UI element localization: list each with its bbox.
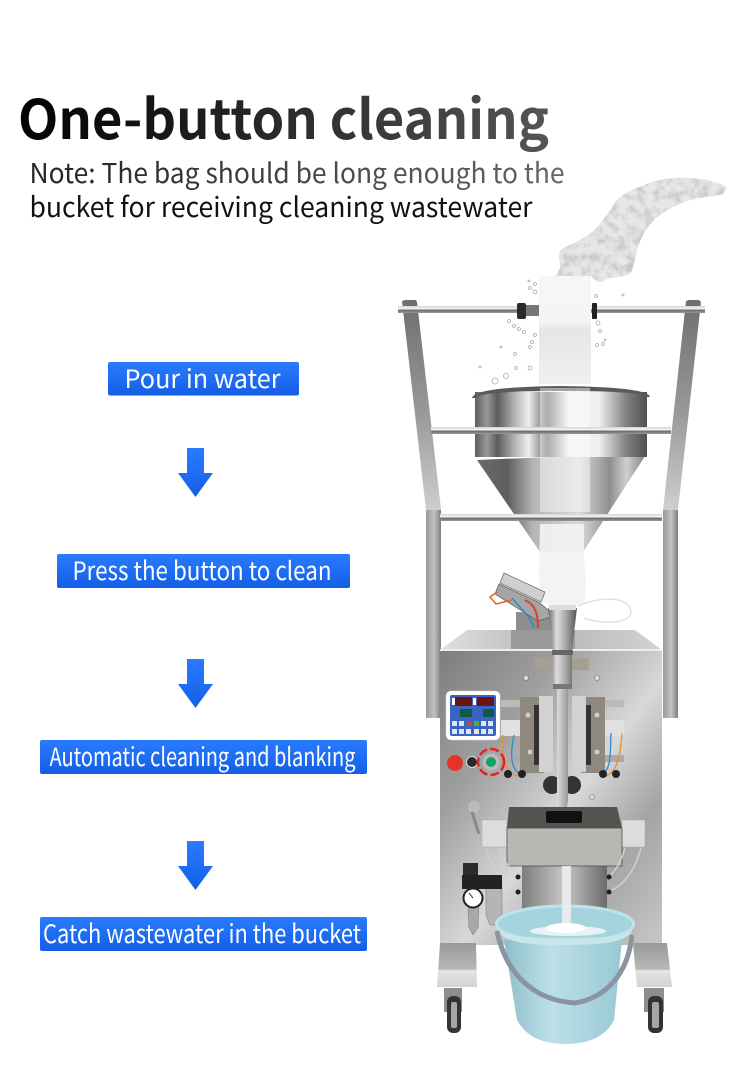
highlighted clean button	[478, 749, 504, 775]
note text: Note: The bag should be long enough to the	[30, 151, 564, 191]
tubes	[503, 733, 622, 776]
left post	[426, 510, 441, 718]
sealing blocks	[501, 696, 624, 794]
screws	[524, 676, 600, 800]
step 1: pour in water: Pour in water	[124, 359, 281, 396]
falling water	[562, 866, 571, 926]
machine body	[440, 630, 662, 945]
title: One-button cleaning	[18, 76, 549, 155]
step 3: automatic cleaning: Automatic cleaning and blanking	[50, 737, 356, 774]
handle	[497, 931, 632, 1003]
bucket	[496, 866, 634, 1044]
frame cross rods	[431, 427, 671, 521]
holes	[504, 770, 620, 778]
filling nozzle	[548, 605, 577, 822]
arrow 1	[178, 448, 213, 497]
lower sealing unit	[468, 801, 645, 910]
arrow 3	[178, 841, 213, 890]
main panel	[440, 650, 662, 945]
displays	[455, 697, 472, 706]
air filter regulator	[462, 863, 502, 935]
emergency stop button	[447, 755, 463, 771]
note text: bucket for receiving cleaning wastewater	[30, 185, 533, 225]
film strip and water through hopper	[539, 276, 591, 612]
arrow 2	[178, 659, 213, 708]
top cover	[440, 630, 662, 650]
hopper	[472, 386, 650, 552]
left arm	[402, 300, 441, 510]
right arm	[663, 300, 701, 510]
dosing cylinders and tubes	[490, 573, 631, 632]
selector switch	[466, 756, 478, 768]
keypad	[452, 721, 493, 734]
machine frame	[398, 300, 705, 718]
support legs	[437, 943, 672, 987]
step 2: press the button: Press the button to clean	[72, 551, 332, 588]
film roller	[398, 306, 705, 313]
note text	[30, 151, 564, 225]
right post	[663, 510, 678, 718]
water splash	[479, 178, 727, 384]
control panel	[446, 691, 500, 740]
step 4: catch wastewater: Catch wastewater in the bucket	[43, 914, 361, 951]
casters	[444, 988, 664, 1033]
